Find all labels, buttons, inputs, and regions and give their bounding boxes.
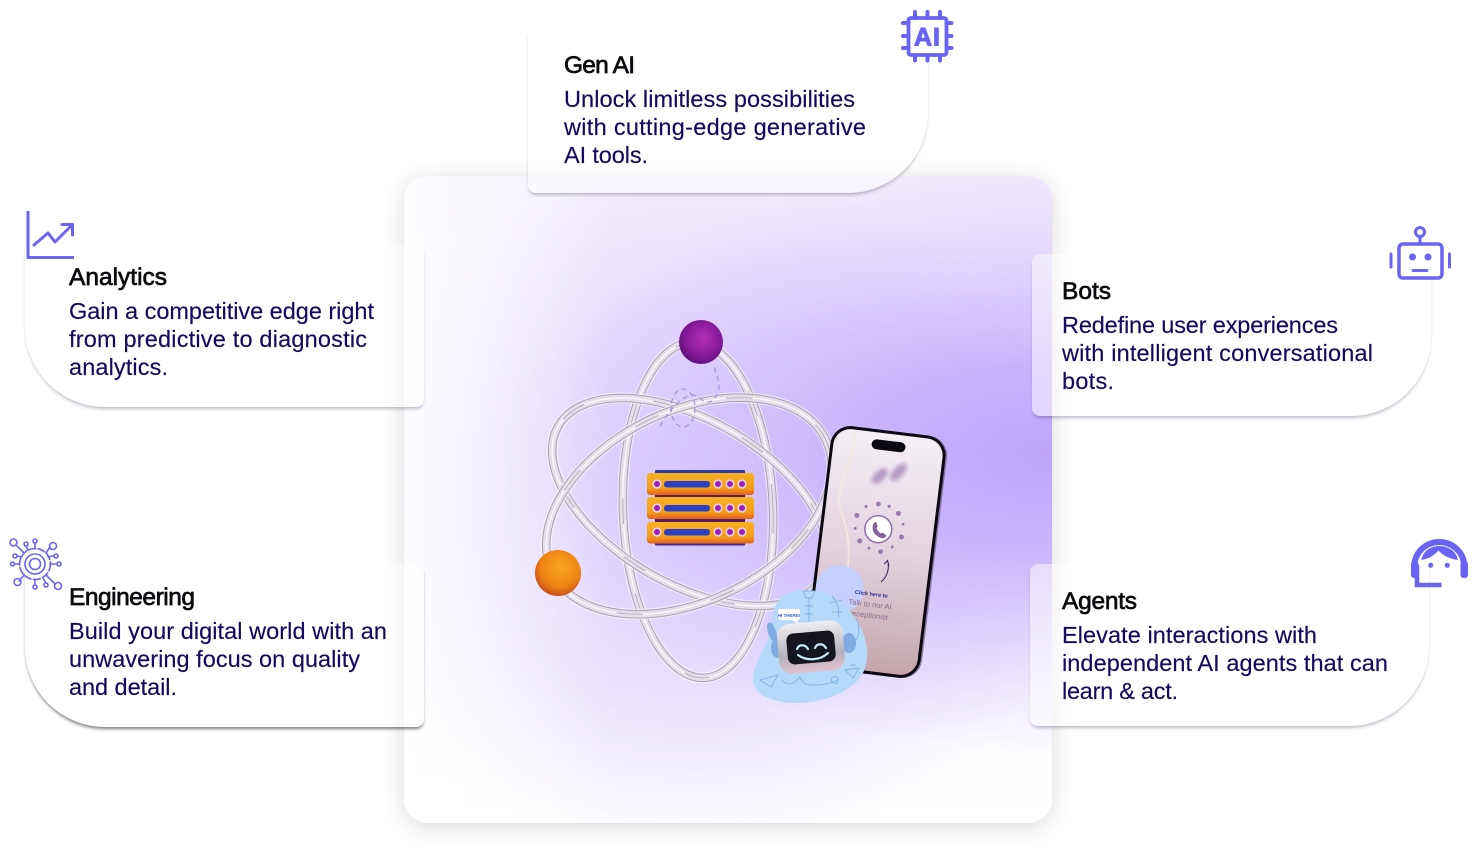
card text: Analytics xyxy=(69,264,167,291)
panel: Bots xyxy=(1032,226,1451,420)
card text: Unlock limitless possibilities xyxy=(564,86,855,112)
panel: central gradient panel xyxy=(404,176,1052,823)
call button xyxy=(850,499,908,557)
card text xyxy=(69,584,387,700)
robot head xyxy=(776,619,846,675)
card text: bots. xyxy=(1062,368,1114,394)
card text: Elevate interactions with xyxy=(1062,622,1317,648)
icon: server stack xyxy=(647,470,754,546)
robot ears xyxy=(765,621,779,643)
phone notch xyxy=(871,439,906,453)
card surface xyxy=(25,565,424,727)
card text: Agents xyxy=(1062,588,1137,615)
card text: with intelligent conversational xyxy=(1061,340,1373,366)
ring: ascending glass orbit xyxy=(511,354,867,658)
panel: Agents xyxy=(1029,539,1468,730)
blurred logo xyxy=(868,457,910,490)
panel: Analytics xyxy=(24,211,425,411)
icon: robot xyxy=(1390,226,1451,280)
card text: Build your digital world with an xyxy=(69,618,387,644)
curved arrow xyxy=(881,560,890,583)
phone caption xyxy=(847,589,893,622)
secondary pale blob xyxy=(813,562,866,616)
phone caption: Talk to our AI xyxy=(848,597,892,611)
card text: unwavering focus on quality xyxy=(69,646,360,672)
card text: Redefine user experiences xyxy=(1062,312,1338,338)
ball: purple sphere xyxy=(679,320,723,364)
card surface xyxy=(1032,254,1431,416)
card text: learn & act. xyxy=(1062,678,1178,704)
dashed motion path xyxy=(660,364,719,427)
card text: and detail. xyxy=(69,674,177,700)
card text: Gain a competitive edge right xyxy=(69,298,374,324)
robot screen xyxy=(786,630,836,665)
card text xyxy=(1062,588,1388,704)
card text: with cutting-edge generative xyxy=(563,114,866,140)
speech bubble: HI THERE! xyxy=(778,613,801,618)
card text: from predictive to diagnostic xyxy=(69,326,367,352)
card text xyxy=(563,52,866,168)
card text: independent AI agents that can xyxy=(1062,650,1388,676)
card surface xyxy=(528,31,928,193)
robot face xyxy=(797,644,828,659)
ring: vertical glass orbit xyxy=(617,339,779,681)
ring: descending glass orbit xyxy=(517,355,863,649)
icon: line chart xyxy=(26,211,74,259)
panel: Engineering xyxy=(9,538,426,732)
phone caption: Click here to xyxy=(855,590,889,600)
card surface xyxy=(25,245,424,407)
phone caption: receptionist xyxy=(849,608,889,622)
card surface xyxy=(1030,564,1429,726)
card text: Engineering xyxy=(69,584,195,611)
phone xyxy=(803,424,949,680)
icon: AI chip xyxy=(901,10,954,62)
card text: Bots xyxy=(1062,278,1111,305)
card text: AI tools. xyxy=(564,142,648,168)
card text xyxy=(1061,278,1373,394)
panel: Gen AI xyxy=(527,10,954,197)
card text xyxy=(68,264,374,380)
icon: engineering gear network xyxy=(9,538,62,590)
icon: AI chip: AI xyxy=(914,24,940,52)
robot badge xyxy=(753,590,867,703)
card text: analytics. xyxy=(69,354,168,380)
card text: Gen AI xyxy=(564,52,635,79)
icon: support agent xyxy=(1411,539,1468,588)
ball: orange sphere xyxy=(535,550,581,596)
